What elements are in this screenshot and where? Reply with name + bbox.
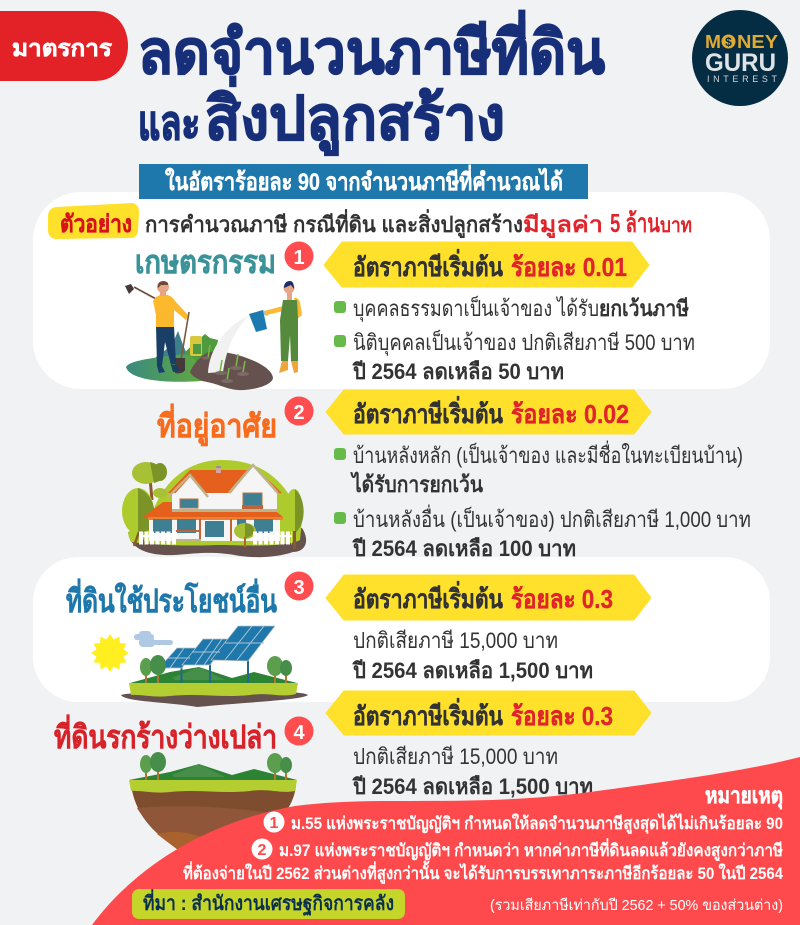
section 3: other use heading	[66, 572, 314, 619]
rate pill 4: ร้อยละ 0.3	[511, 701, 613, 731]
icon: house illustration	[122, 460, 306, 557]
rate pill 3: อัตราภาษีเริ่มต้น	[353, 580, 503, 614]
example heading: มีมูลค่า	[523, 212, 603, 239]
rate pill 4: อัตราภาษีเริ่มต้น	[353, 697, 503, 731]
example heading	[48, 203, 692, 239]
details 3: ปกติเสียภาษี 15,000 บาท	[353, 628, 558, 653]
rate pill 3: ร้อยละ 0.3	[511, 584, 613, 614]
rate pill 1: ร้อยละ 0.01	[511, 252, 627, 282]
details 1: นิติบุคคลเป็นเจ้าของ ปกติเสียภาษี 500 บาท	[353, 328, 695, 356]
logo: Money Guru Interest: M	[705, 32, 721, 52]
calculation note: (รวมเสียภาษีเท่ากับปี 2562 + 50% ของส่วนต่าง)	[490, 897, 783, 914]
note 2: 2	[258, 842, 267, 859]
details 4	[352, 744, 593, 799]
example heading: ตัวอย่าง	[60, 211, 132, 238]
section 4: vacant land heading: ที่ดินรกร้างว่างเปล่า	[54, 714, 277, 755]
subtitle band	[139, 164, 588, 199]
title: และ	[138, 96, 200, 149]
red tag	[0, 11, 128, 81]
source label	[132, 888, 405, 919]
section 3: other use heading: ที่ดินใช้ประโยชน์อื่น	[66, 578, 277, 619]
example heading: 5 ล้าน	[610, 208, 660, 238]
subtitle band: ในอัตราร้อยละ 90 จากจำนวนภาษีที่คำนวณได้	[165, 164, 563, 196]
note 1: 1	[270, 815, 279, 832]
title: สิ่งปลูกสร้าง	[205, 76, 505, 156]
details 2: ปี 2564 ลดเหลือ 100 บาท	[352, 536, 576, 561]
notes heading: หมายเหตุ	[705, 783, 783, 810]
rate pill 3	[326, 575, 651, 620]
title: ลดจำนวนภาษีที่ดิน	[138, 10, 605, 86]
example heading: การคำนวณภาษี กรณีที่ดิน และสิ่งปลูกสร้าง	[145, 208, 523, 239]
details 1: บุคคลธรรมดาเป็นเจ้าของ ได้รับ	[353, 294, 599, 322]
details 1	[334, 294, 695, 384]
section 2: residential heading: ที่อยู่อาศัย	[157, 403, 277, 447]
icon: floating land illustration	[129, 752, 297, 850]
details 4: ปกติเสียภาษี 15,000 บาท	[353, 744, 558, 769]
section 2: residential heading: 2	[293, 402, 305, 424]
details 1: ปี 2564 ลดเหลือ 50 บาท	[352, 359, 564, 384]
panel: white example panel 3	[33, 557, 770, 702]
rate pill 1	[324, 242, 649, 287]
logo: Money Guru Interest: GURU	[705, 49, 776, 77]
icon: farmers illustration	[125, 281, 302, 390]
details 3	[352, 628, 593, 683]
example heading: บาท	[660, 215, 692, 237]
details 1: ยกเว้นภาษี	[599, 296, 689, 321]
rate pill 2: อัตราภาษีเริ่มต้น	[353, 395, 503, 429]
note 2	[183, 838, 783, 885]
title	[138, 10, 605, 156]
rate pill 2	[326, 390, 651, 434]
logo: Money Guru Interest: $	[725, 35, 732, 49]
details 2: ได้รับการยกเว้น	[350, 471, 483, 497]
rate pill 4	[326, 691, 651, 735]
section 1: agriculture heading: เกษตรกรรม	[135, 244, 276, 280]
icon: solar farm illustration	[91, 626, 308, 707]
logo: Money Guru Interest	[692, 10, 788, 106]
source label: ที่มา : สำนักงานเศรษฐกิจการคลัง	[143, 888, 394, 917]
section 1: agriculture heading: 1	[293, 247, 305, 269]
details 2	[334, 440, 751, 561]
section 3: other use heading: 3	[293, 577, 305, 599]
panel: white example panel 1	[33, 192, 770, 389]
logo: Money Guru Interest: NEY	[737, 32, 778, 52]
section 4: vacant land heading: 4	[293, 722, 305, 744]
section 2: residential heading	[157, 396, 314, 447]
rate pill 2: ร้อยละ 0.02	[511, 399, 629, 429]
logo: Money Guru Interest: INTEREST	[707, 74, 778, 84]
details 4: ปี 2564 ลดเหลือ 1,500 บาท	[352, 774, 593, 799]
panel: red notes footer	[92, 757, 800, 925]
details 3: ปี 2564 ลดเหลือ 1,500 บาท	[352, 658, 593, 683]
red tag: มาตรการ	[12, 35, 113, 61]
rate pill 1: อัตราภาษีเริ่มต้น	[353, 248, 503, 282]
